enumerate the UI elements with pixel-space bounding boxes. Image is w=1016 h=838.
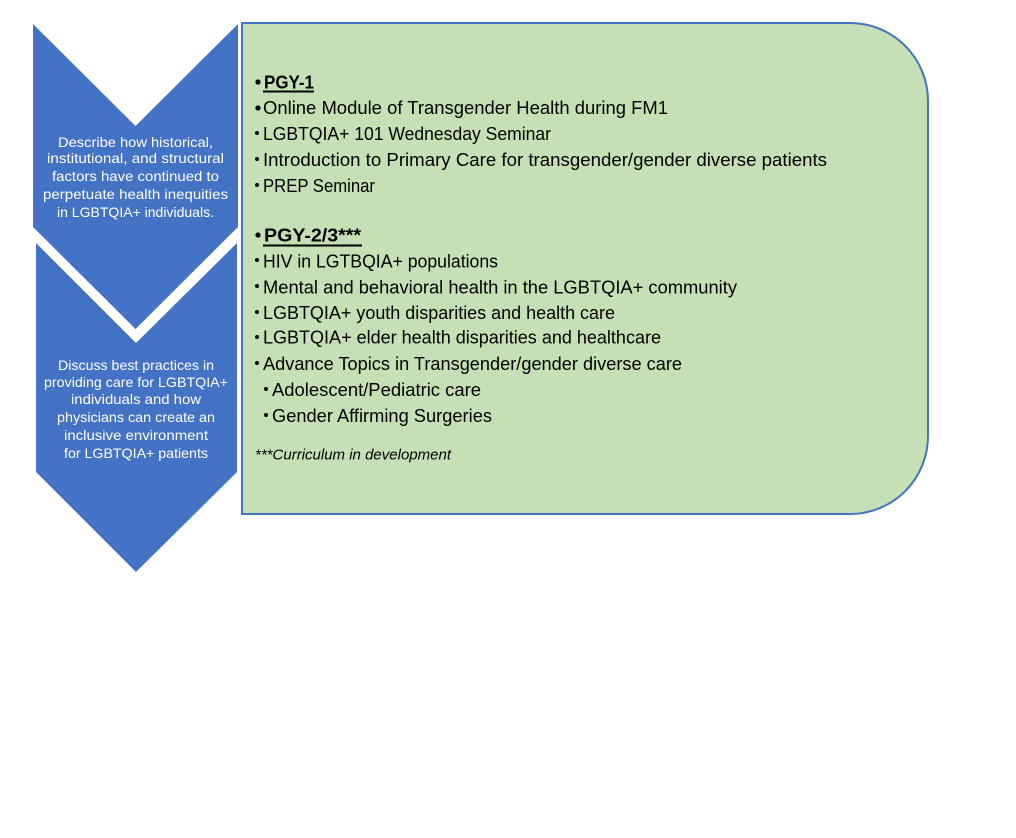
objective text 1: institutional, and structural xyxy=(47,151,224,166)
PGY-1 list xyxy=(255,97,827,196)
objective text 2: for LGBTQIA+ patients xyxy=(64,446,208,461)
PGY-2/3 list: Advance Topics in Transgender/gender diverse care xyxy=(263,353,682,374)
PGY-2/3 list: Adolescent/Pediatric care xyxy=(272,379,481,400)
objective text 2: physicians can create an xyxy=(57,410,215,425)
objective text 2: individuals and how xyxy=(71,392,201,407)
PGY-1 list: LGBTQIA+ 101 Wednesday Seminar xyxy=(263,123,551,144)
PGY-2/3 list: LGBTQIA+ elder health disparities and healthcare xyxy=(263,326,661,348)
objective text 1 xyxy=(43,135,228,220)
objective text 1: in LGBTQIA+ individuals. xyxy=(57,205,214,220)
PGY-2/3 list: Gender Affirming Surgeries xyxy=(272,405,492,426)
objective text 1: perpetuate health inequities xyxy=(43,187,228,202)
PGY-2/3 list: LGBTQIA+ youth disparities and health care xyxy=(263,302,615,323)
PGY-2/3 heading: PGY-2/3*** xyxy=(264,225,362,246)
panel: curriculum xyxy=(242,23,928,514)
objective text 2: inclusive environment xyxy=(64,428,208,443)
PGY-1 list: PREP Seminar xyxy=(263,175,375,196)
chevron 1: health inequities objective xyxy=(33,24,238,329)
objective text 2 xyxy=(44,358,228,461)
objective text 1: factors have continued to xyxy=(52,169,219,184)
objective text 1: Describe how historical, xyxy=(58,135,213,150)
PGY-1 heading: PGY-1 xyxy=(264,72,314,92)
PGY-1 list: Introduction to Primary Care for transgender/gender diverse patients xyxy=(263,149,827,170)
chevron 2: best practices objective xyxy=(36,243,237,572)
PGY-2/3 list: Mental and behavioral health in the LGBTQIA+ community xyxy=(263,277,738,298)
objective text 2: providing care for LGBTQIA+ xyxy=(44,375,228,390)
objective text 2: Discuss best practices in xyxy=(58,358,214,373)
PGY-2/3 list xyxy=(255,251,738,426)
PGY-1 list: Online Module of Transgender Health during FM1 xyxy=(263,97,668,118)
footnote: ***Curriculum in development xyxy=(255,448,452,464)
PGY-2/3 list: HIV in LGTBQIA+ populations xyxy=(263,251,498,272)
